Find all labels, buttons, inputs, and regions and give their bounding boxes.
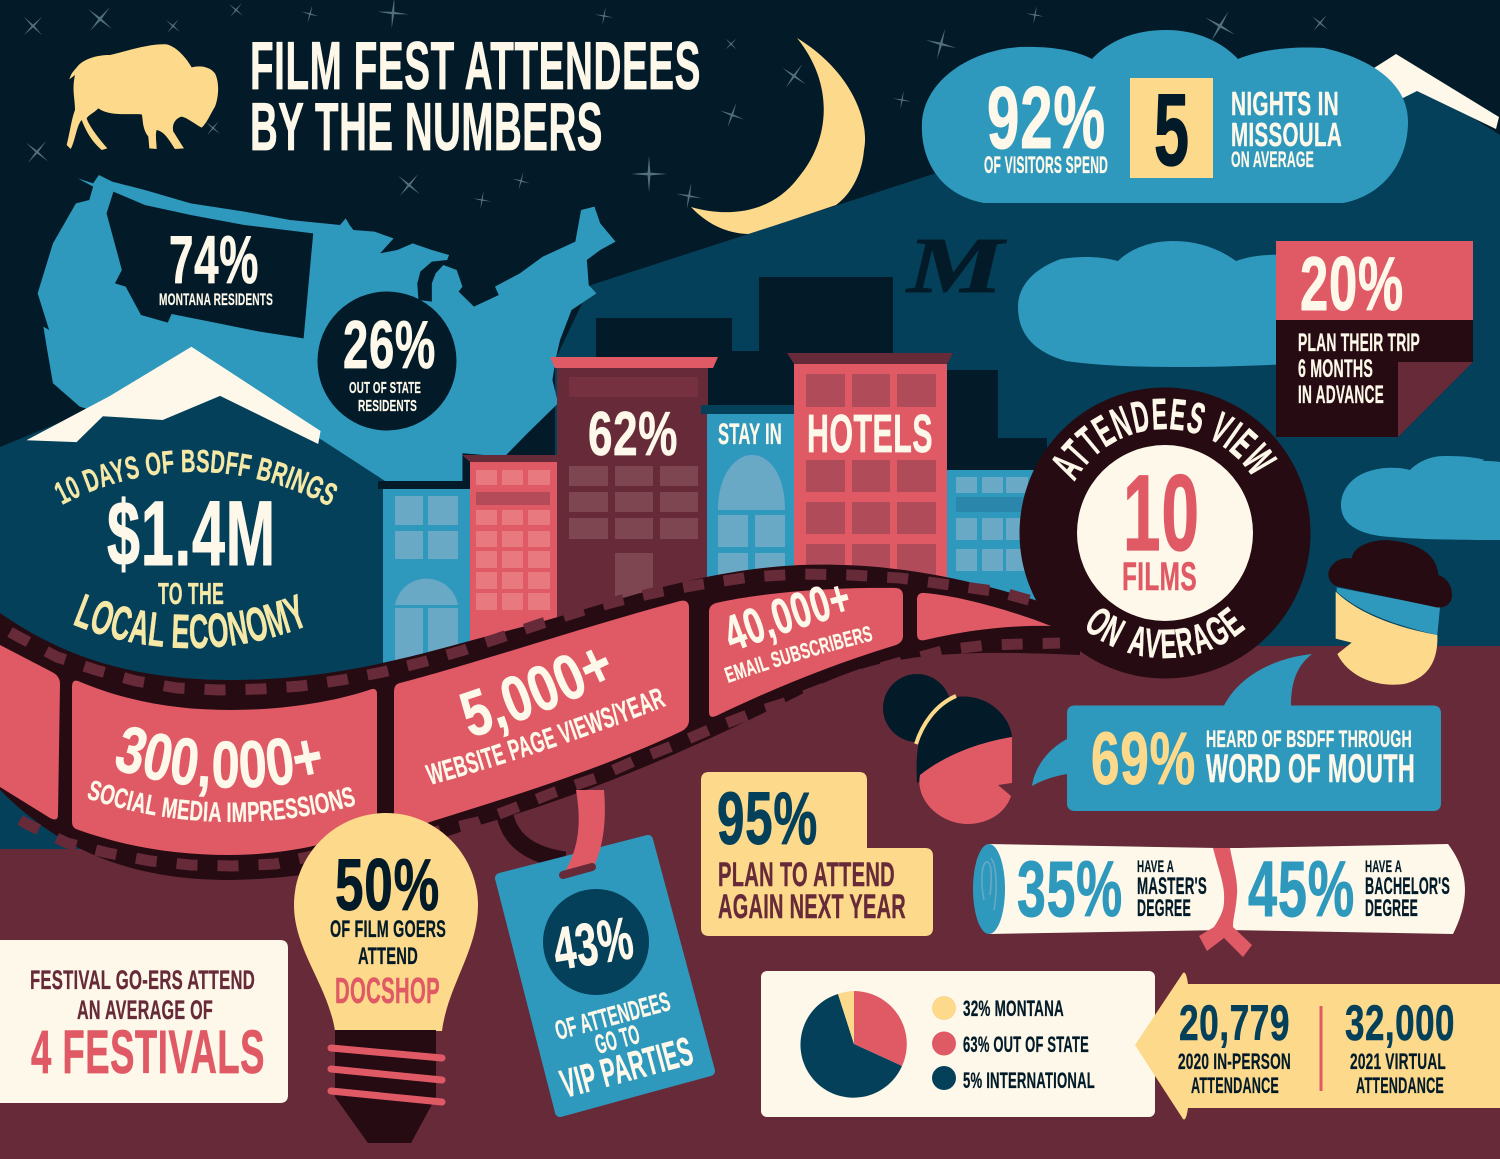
stat: 62%: 62%: [588, 400, 678, 469]
building: hotels: [787, 353, 953, 604]
label: hotels: HOTELS: [807, 404, 933, 464]
label: of attendees go to VIP parties: VIP PARTIES: [556, 1029, 698, 1107]
legend: 63% OUT OF STATE: [963, 1032, 1089, 1057]
label: heard of BSDFF through word of mouth: [1206, 726, 1415, 791]
stat: 95%: 95%: [717, 777, 818, 860]
icon: bison: [67, 44, 218, 150]
stat: 32,000: [1345, 995, 1455, 1098]
stat: 26% out of state residents: RESIDENTS: [358, 398, 417, 415]
economy text: [54, 450, 338, 649]
title: FILM FEST ATTENDEES: [250, 28, 701, 104]
economy text: TO THE: [158, 576, 224, 611]
label: of attendees go to VIP parties: GO TO: [592, 1019, 643, 1060]
film strip: [0, 564, 1080, 880]
title: [250, 28, 701, 165]
stat: 10 films: FILMS: [1122, 555, 1197, 599]
panel: attendee origins: [761, 971, 1155, 1117]
icon: man with hat: [1328, 540, 1452, 685]
panel: 4 festivals: AN AVERAGE OF: [77, 995, 213, 1025]
stat: 74% Montana residents: [159, 222, 273, 309]
panel: 4 festivals: [0, 940, 288, 1103]
stat: 74% Montana residents: 74%: [169, 222, 259, 298]
stat: 50%: 50%: [335, 845, 440, 926]
stat: 20,779: [1178, 995, 1291, 1098]
label: of attendees go to VIP parties: OF ATTENDEES: [552, 986, 674, 1046]
label: plan to attend again next year: [718, 856, 906, 926]
label: email subscribers: EMAIL SUBSCRIBERS: [724, 626, 872, 683]
label: of film goers attend docshop: OF FILM GOERS: [330, 916, 446, 943]
cloud: middle: [1018, 241, 1290, 367]
callout: plan their trip: [1276, 241, 1473, 437]
building: salmon: [462, 455, 560, 642]
label: stay in: STAY IN: [718, 418, 782, 451]
building: blue stay in: [701, 405, 797, 604]
building: right blue: [947, 470, 1047, 610]
stat: 45% bachelor's degree: HAVE A: [1365, 857, 1402, 876]
economy text: LOCAL ECONOMY: [73, 594, 304, 649]
label: plan their trip 6 months in advance: 6 MONTHS: [1298, 355, 1373, 383]
film frame: right: [917, 593, 1051, 640]
map: Montana: [107, 192, 313, 338]
callout: 95% plan to attend: [701, 772, 933, 936]
right mountain: [555, 70, 1500, 660]
stat: $1.4M: $1.4M: [107, 483, 276, 585]
stat: 32,000: 2021 VIRTUAL: [1350, 1049, 1446, 1074]
scroll end: [973, 844, 1005, 934]
legend: [932, 996, 1095, 1093]
film loop behind badge: [505, 815, 565, 860]
stat: 300,000+: 300,000+: [116, 726, 321, 797]
stat: 20,779: 2020 IN-PERSON: [1178, 1049, 1291, 1074]
box: 5 nights: 5: [1154, 73, 1190, 187]
stat: 26% out of state residents: [318, 292, 456, 430]
label: plan their trip 6 months in advance: IN ADVANCE: [1298, 381, 1384, 409]
label: of film goers attend docshop: [330, 916, 446, 1011]
stat: 43%: 43%: [549, 904, 638, 983]
ground: [0, 640, 1500, 1159]
economy text: 10 DAYS OF BSDFF BRINGS: [54, 450, 338, 505]
label: nights in Missoula: ON AVERAGE: [1231, 147, 1314, 172]
ribbon: [1199, 848, 1252, 957]
label: nights in Missoula: MISSOULA: [1231, 116, 1342, 153]
film frame: social media: [72, 680, 377, 855]
stat: 45% bachelor's degree: 45%: [1248, 844, 1355, 933]
stat: 74% Montana residents: MONTANA RESIDENTS: [159, 290, 273, 309]
snow cap: right mountain: [1374, 54, 1499, 129]
building: blue left: [378, 481, 474, 678]
label: website page views/year: WEBSITE PAGE VIEWS/YEAR: [424, 688, 666, 784]
stat: 20,779: 20,779: [1179, 995, 1290, 1051]
panel: 4 festivals: FESTIVAL GO-ERS ATTEND: [30, 965, 255, 995]
label: of film goers attend docshop: DOCSHOP: [335, 970, 440, 1011]
stat: 26% out of state residents: OUT OF STATE: [349, 380, 421, 397]
stat: 10 films: [1122, 452, 1200, 599]
stat: 32,000: 32,000: [1345, 995, 1455, 1051]
diploma scroll: [973, 844, 1465, 957]
label: nights in Missoula: [1231, 85, 1342, 172]
legend: 32% MONTANA: [963, 996, 1064, 1021]
label: plan to attend again next year: AGAIN NEXT YEAR: [718, 888, 906, 926]
label: plan to attend again next year: PLAN TO ATTEND: [718, 856, 895, 894]
stat: 45% bachelor's degree: DEGREE: [1365, 895, 1418, 922]
stat: 10 films: 10: [1123, 452, 1200, 573]
left mountain: [0, 370, 480, 849]
cloud: right: [1341, 456, 1500, 540]
starry sky: [15, 0, 1335, 211]
cloud: nights in Missoula: [922, 30, 1408, 203]
stat: 26% out of state residents: 26%: [343, 307, 436, 383]
lanyard badge: VIP parties: [500, 790, 710, 1112]
stat: 20%: 20%: [1300, 242, 1404, 327]
stat: 20,779: ATTENDANCE: [1191, 1073, 1279, 1098]
badge: attendees view 10 films: [1020, 388, 1310, 678]
film frame: website: [394, 600, 689, 823]
label: of visitors spend: OF VISITORS SPEND: [984, 152, 1108, 179]
pie chart: [800, 991, 907, 1098]
speech bubble: word of mouth: [1032, 654, 1441, 811]
stat: 35% master's degree: MASTER'S: [1137, 873, 1207, 900]
icon: crescent moon: [691, 38, 865, 234]
stat: 35% master's degree: 35%: [1017, 844, 1123, 933]
label: of film goers attend docshop: ATTEND: [358, 943, 418, 970]
legend: 5% INTERNATIONAL: [963, 1068, 1095, 1093]
building: maroon with 62%: [550, 357, 718, 638]
label: on average: ON AVERAGE: [1087, 606, 1246, 658]
film frame: left: [0, 645, 60, 819]
arrow: attendance: [1135, 972, 1500, 1120]
label: nights in Missoula: NIGHTS IN: [1231, 85, 1339, 122]
label: plan their trip 6 months in advance: [1298, 329, 1420, 409]
stat: 92%: 92%: [987, 68, 1106, 167]
building silhouettes: [596, 277, 1047, 478]
stat: 35% master's degree: HAVE A: [1137, 857, 1174, 876]
label: social media impressions: SOCIAL MEDIA IMPRESSIONS: [88, 780, 355, 822]
stat: 4 festivals: 4 FESTIVALS: [31, 1018, 265, 1086]
icon: lightbulb with 50% docshop: [294, 813, 478, 1143]
film frame: email: [709, 586, 903, 717]
snow cap: left mountain: [26, 347, 321, 444]
M hillside logo: M: [904, 223, 1007, 310]
stat: 40,000+: 40,000+: [728, 586, 848, 648]
stat: 5,000+: 5,000+: [459, 650, 609, 738]
label: of attendees go to VIP parties: [552, 986, 698, 1107]
title: BY THE NUMBERS: [250, 89, 603, 165]
icon: woman with bun: [883, 674, 1012, 824]
stat: 35% master's degree: DEGREE: [1137, 895, 1191, 922]
map: United States: [38, 175, 616, 487]
stat: 69%: 69%: [1091, 717, 1196, 800]
label: attendees view: ATTENDEES VIEW: [1052, 398, 1278, 482]
